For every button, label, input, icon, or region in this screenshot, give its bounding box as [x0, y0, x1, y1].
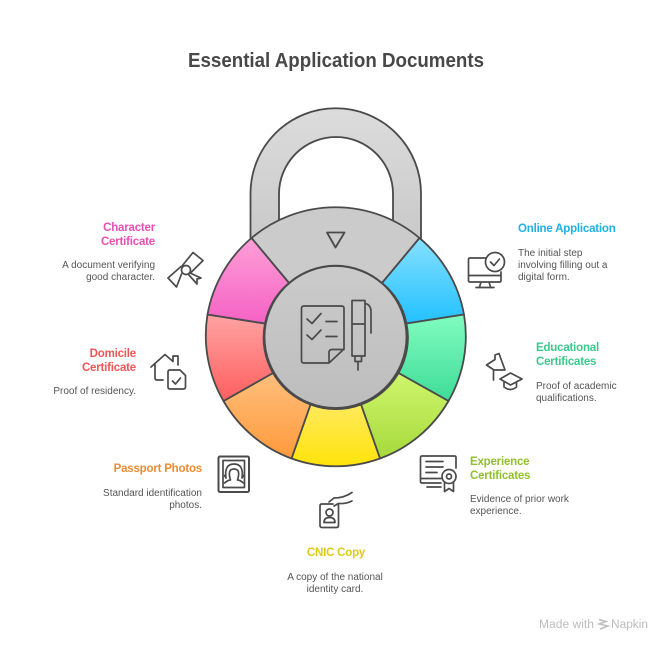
- heading: Character: [103, 222, 156, 234]
- icon: portrait photo frame: [218, 456, 249, 492]
- description: photos.: [169, 500, 202, 511]
- segment: experience certificates: [361, 373, 448, 458]
- heading: Certificates: [536, 356, 596, 368]
- attribution: Made with Napkin: [539, 619, 648, 631]
- description: Proof of academic: [536, 381, 617, 392]
- segment: character certificate: [208, 238, 289, 324]
- description: Proof of residency.: [53, 386, 136, 397]
- icon: flag and graduation cap: [486, 354, 522, 390]
- icon: checklist and pen: [302, 300, 371, 370]
- description: digital form.: [518, 272, 570, 283]
- brand name: Napkin: [611, 619, 648, 631]
- icon: rolled diploma: [168, 252, 203, 287]
- block: experience certificates: [420, 456, 570, 517]
- icon: certificate with seal: [420, 456, 456, 492]
- heading: Educational: [536, 342, 599, 354]
- heading: Certificate: [82, 362, 136, 374]
- title: Essential Application Documents: [188, 50, 484, 72]
- description: involving filling out a: [518, 260, 608, 271]
- description: The initial step: [518, 248, 583, 259]
- dial segment: top grey with pointer: [252, 207, 420, 283]
- description: experience.: [470, 506, 522, 517]
- description: qualifications.: [536, 393, 597, 404]
- segment: CNIC copy: [292, 404, 380, 466]
- padlock shackle: [250, 108, 421, 240]
- attribution text: Made with: [539, 619, 594, 631]
- block: domicile certificate: [53, 348, 186, 397]
- pointer triangle: [327, 232, 344, 248]
- block: educational certificates: [486, 342, 617, 404]
- icon: napkin logo: [599, 620, 608, 629]
- description: A document verifying: [62, 260, 155, 271]
- block: character certificate: [62, 222, 203, 287]
- block: passport photos: [103, 456, 249, 511]
- heading: Passport Photos: [114, 463, 202, 475]
- description: good character.: [86, 272, 155, 283]
- segment: online application: [382, 238, 464, 324]
- description: Evidence of prior work: [470, 494, 570, 505]
- segment: domicile certificate: [206, 314, 273, 401]
- heading: Certificate: [101, 236, 155, 248]
- heading: Domicile: [90, 348, 136, 360]
- heading: CNIC Copy: [307, 547, 366, 559]
- block: CNIC copy: [287, 492, 383, 595]
- icon: house with document: [151, 354, 186, 389]
- description: Standard identification: [103, 488, 202, 499]
- heading: Online Application: [518, 223, 616, 235]
- block: online application: [468, 223, 616, 288]
- description: A copy of the national: [287, 572, 383, 583]
- segment: passport photos: [224, 373, 310, 458]
- central hub: [264, 266, 406, 408]
- description: identity card.: [307, 584, 363, 595]
- padlock diagram: [206, 108, 466, 466]
- segment: educational certificates: [398, 314, 466, 401]
- icon: monitor with check: [468, 252, 504, 288]
- heading: Certificates: [470, 470, 530, 482]
- heading: Experience: [470, 456, 529, 468]
- icon: hand holding ID card: [320, 492, 352, 528]
